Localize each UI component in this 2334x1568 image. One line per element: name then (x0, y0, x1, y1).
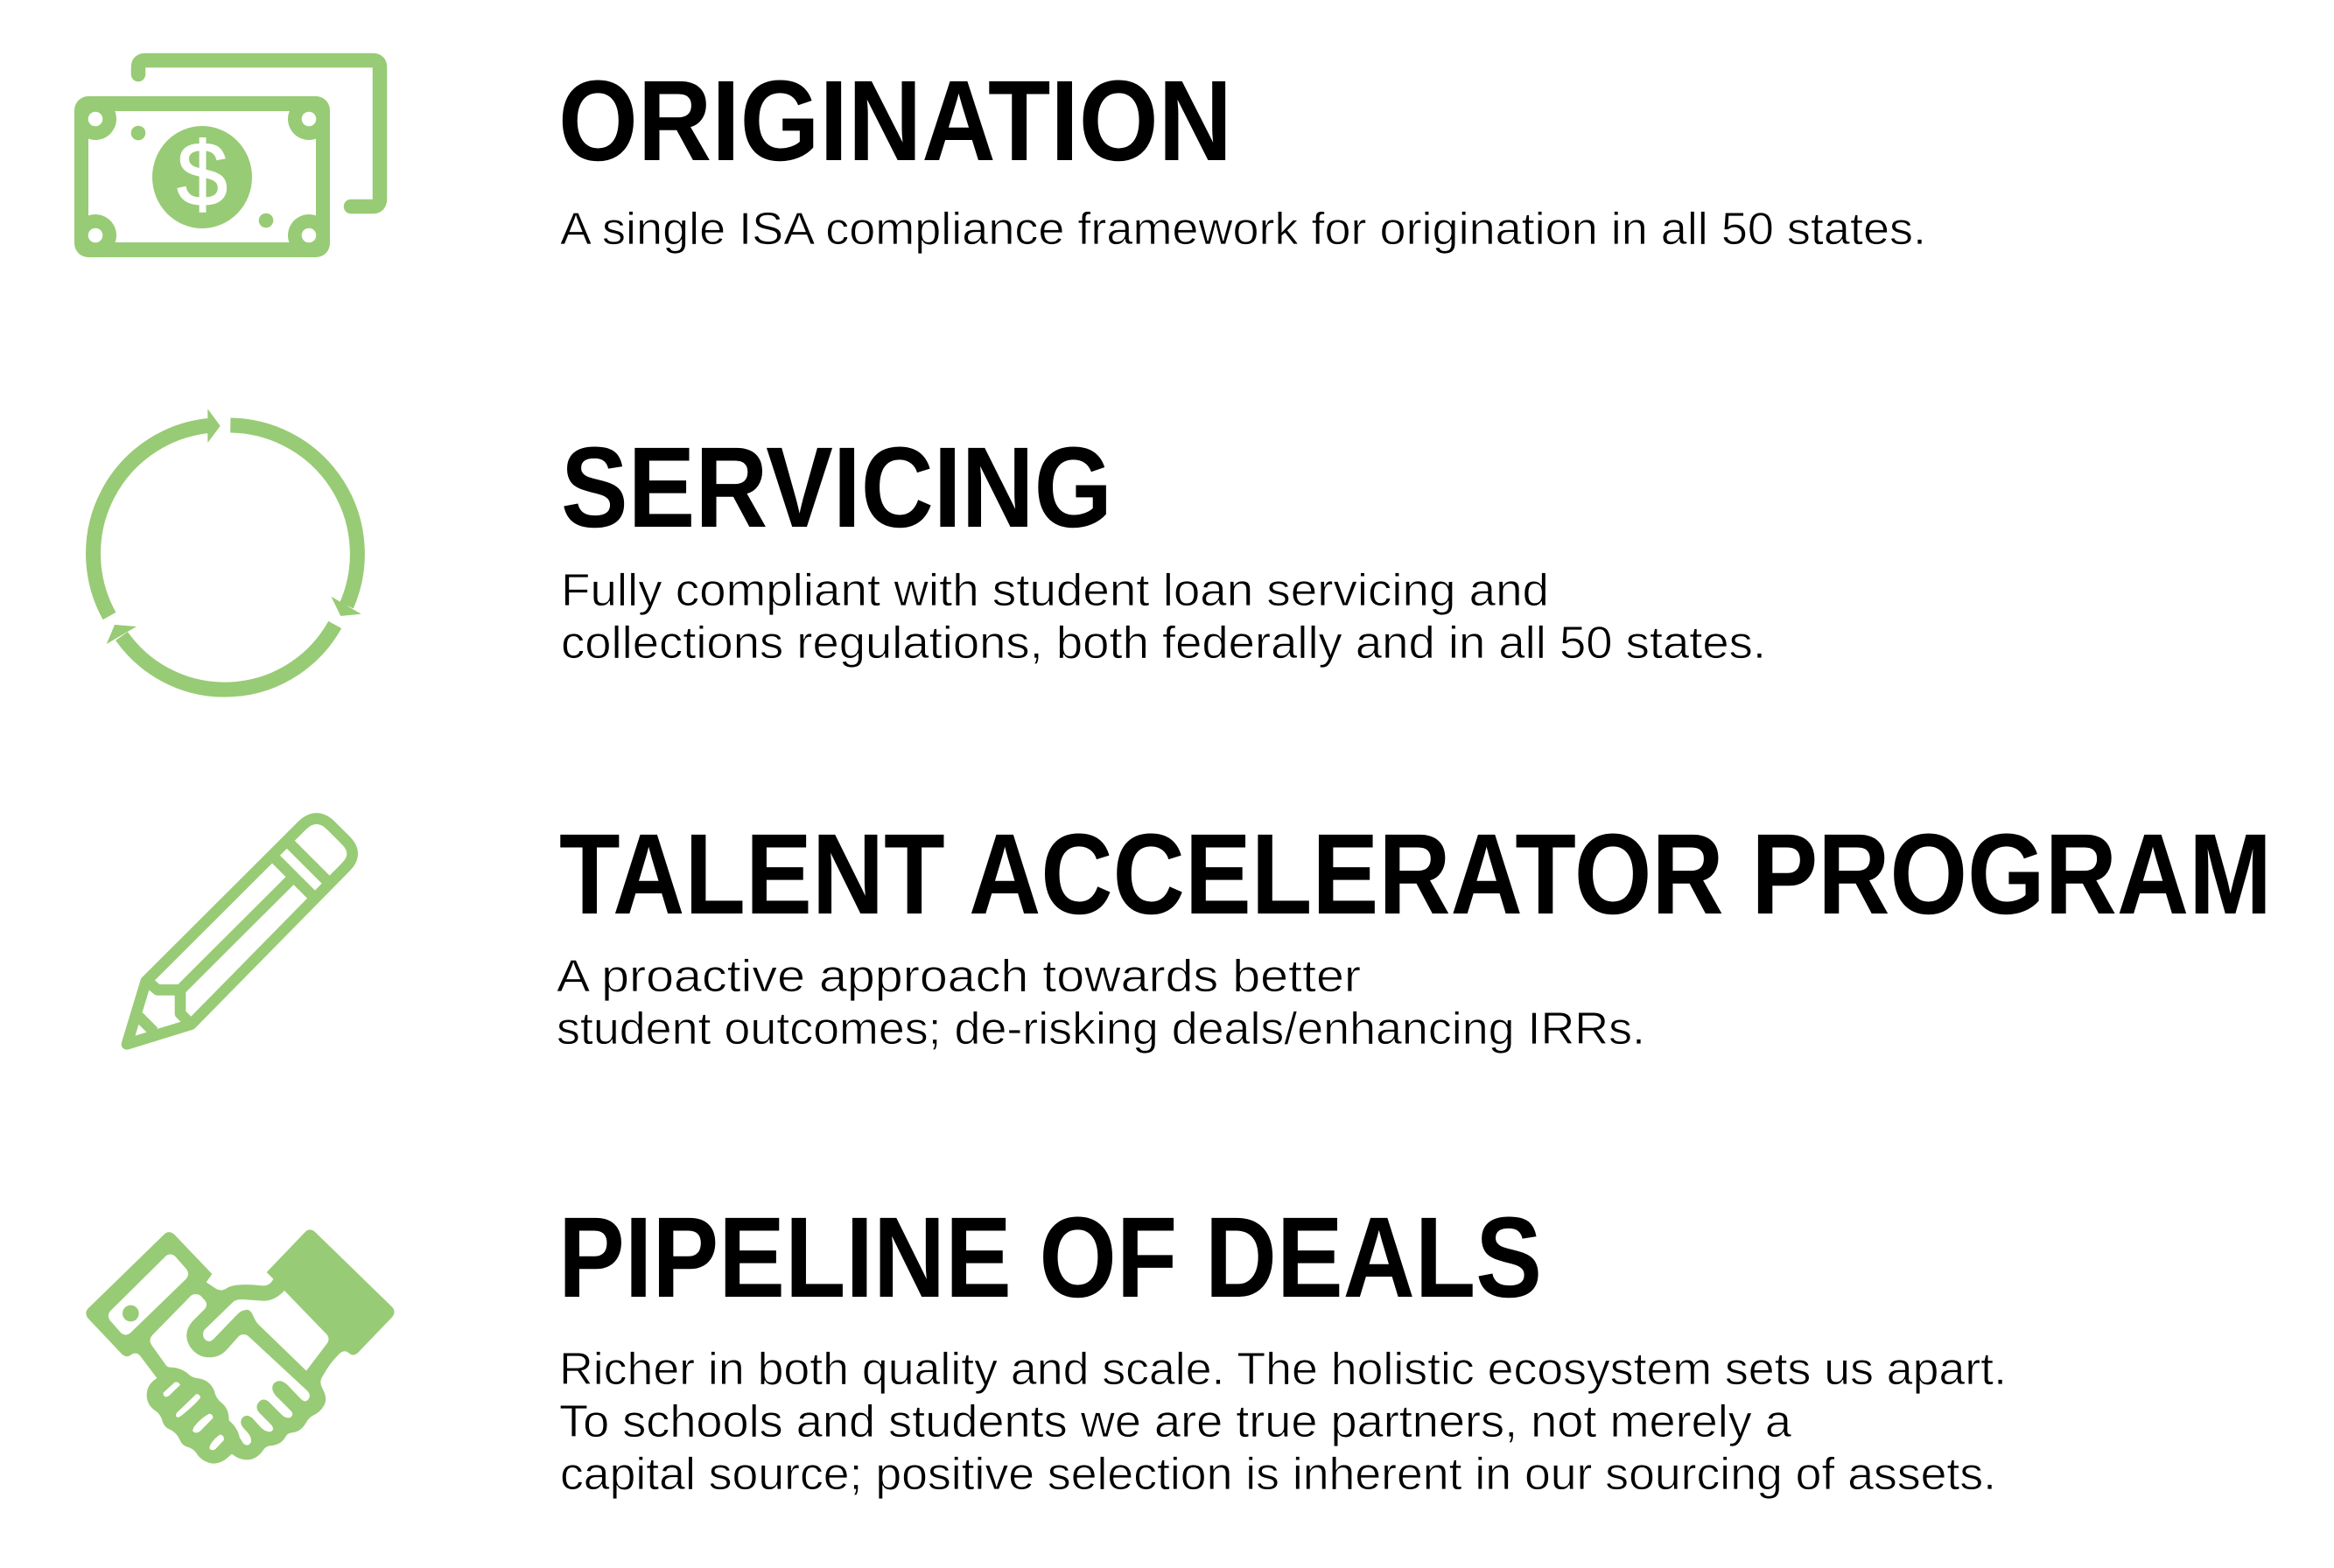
description: origination: A single ISA compliance framework for origination in all 50 states. (560, 204, 1926, 255)
back banknote outline (138, 60, 380, 206)
dollar medallion (152, 126, 252, 228)
panel: pipeline of deals (86, 1193, 2007, 1500)
description: talent accelerator program: A proactive approach towards better (557, 951, 1361, 1002)
arc arrow right (230, 425, 357, 606)
panel: servicing (94, 409, 1766, 690)
banknote dots (131, 126, 273, 228)
dollar sign: $ (177, 124, 228, 226)
front banknote frame (74, 96, 330, 257)
pencil details (138, 840, 330, 1032)
heading: origination: ORIGINATION (558, 56, 1232, 185)
icon: circular arrows (94, 409, 361, 690)
arc arrow bottom (122, 625, 335, 690)
description: pipeline of deals (559, 1344, 2007, 1500)
description: pipeline of deals: capital source; positive selection is inherent in our sourcing of assets. (560, 1449, 1996, 1500)
icon: banknotes with dollar sign (74, 60, 380, 257)
description: talent accelerator program (557, 951, 1645, 1054)
arrowheads (107, 409, 361, 644)
description: pipeline of deals: To schools and students we are true partners, not merely a (559, 1396, 1791, 1447)
heading: pipeline of deals: PIPELINE OF DEALS (558, 1193, 1542, 1321)
banknote corner holes (88, 112, 316, 242)
description: talent accelerator program: student outcomes; de-risking deals/enhancing IRRs. (557, 1004, 1645, 1054)
icon: pencil (127, 818, 353, 1044)
description: servicing: Fully compliant with student loan servicing and (561, 565, 1549, 616)
pencil outline (127, 818, 353, 1044)
heading: servicing: SERVICING (561, 423, 1112, 551)
description: servicing (561, 565, 1766, 668)
arc arrow left (94, 425, 208, 616)
handshake silhouette (86, 1229, 394, 1464)
cuff button (123, 1306, 139, 1321)
panel: origination (74, 56, 1926, 257)
description: pipeline of deals: Richer in both quality and scale. The holistic ecosystem sets us apart. (559, 1344, 2007, 1395)
icon: handshake (86, 1229, 394, 1464)
banknote corners (74, 98, 330, 256)
panel: talent accelerator program (127, 809, 2272, 1054)
description: servicing: collections regulations, both federally and in all 50 states. (561, 618, 1766, 668)
